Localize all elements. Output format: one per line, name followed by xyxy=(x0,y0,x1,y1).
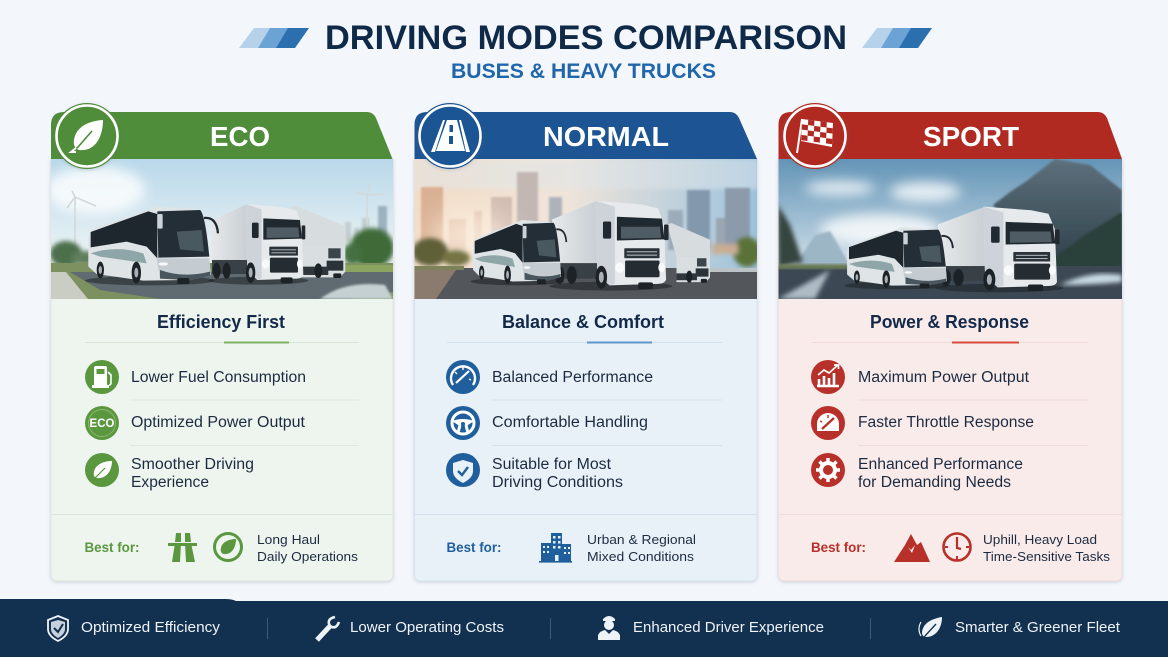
icon: shield check xyxy=(446,453,480,487)
icon: gear xyxy=(811,453,845,487)
icon: fuel pump xyxy=(85,360,119,394)
icon: leaf ring xyxy=(214,534,242,560)
best for: Long Haul xyxy=(257,532,320,547)
decorative right stripes icon xyxy=(862,28,932,48)
section heading: Efficiency First xyxy=(157,312,285,332)
eco photo xyxy=(45,159,394,300)
mode banner xyxy=(414,112,757,159)
feature list: Experience xyxy=(131,474,209,491)
mode title: SPORT xyxy=(923,121,1019,152)
icon: checkered flag badge xyxy=(782,103,848,169)
card body xyxy=(414,159,757,581)
icon: eco: ECO xyxy=(90,418,115,430)
feature list xyxy=(85,360,359,491)
feature list: Suitable for Most xyxy=(492,456,612,473)
feature list: for Demanding Needs xyxy=(858,474,1011,491)
mode banner xyxy=(778,112,1122,159)
subtitle: BUSES & HEAVY TRUCKS xyxy=(451,60,716,83)
sport photo xyxy=(778,159,1123,299)
feature list xyxy=(811,360,1088,491)
panel: normal xyxy=(412,103,761,581)
feature list: Smoother Driving xyxy=(131,456,254,473)
feature list: Optimized Power Output xyxy=(131,414,306,431)
icon: wrench xyxy=(317,617,339,640)
icon: shield xyxy=(48,616,68,641)
icon: throttle gauge xyxy=(811,406,845,440)
icon: leaf badge xyxy=(54,103,120,169)
best for xyxy=(446,532,696,564)
best for xyxy=(811,532,1111,564)
mode banner xyxy=(51,112,392,159)
footer bar: Smarter & Greener Fleet xyxy=(955,620,1120,636)
icon: city buildings xyxy=(539,533,572,563)
icon: road badge xyxy=(417,103,483,169)
feature list: Comfortable Handling xyxy=(492,414,648,431)
panel: eco xyxy=(45,103,394,581)
normal photo xyxy=(412,159,761,299)
icon: mountain xyxy=(894,534,930,562)
footer bar: Lower Operating Costs xyxy=(350,620,504,636)
icon: eco xyxy=(85,406,119,440)
best for: Time-Sensitive Tasks xyxy=(983,549,1111,564)
section heading: Power & Response xyxy=(870,312,1029,332)
feature list: Lower Fuel Consumption xyxy=(131,369,306,386)
mode title: ECO xyxy=(210,121,270,152)
best for: Daily Operations xyxy=(257,549,359,564)
best for: Uphill, Heavy Load xyxy=(983,532,1097,547)
feature list: Maximum Power Output xyxy=(858,369,1030,386)
feature list xyxy=(446,360,722,491)
icon: leaf xyxy=(85,453,119,487)
footer bar xyxy=(0,599,1168,657)
best for: Best for: xyxy=(446,540,502,555)
footer bar: Optimized Efficiency xyxy=(81,620,221,636)
best for: Urban & Regional xyxy=(587,532,696,547)
best for: Mixed Conditions xyxy=(587,549,695,564)
feature list: Balanced Performance xyxy=(492,369,653,386)
decorative left stripes icon xyxy=(239,28,309,48)
icon: steering wheel xyxy=(446,406,480,440)
card body xyxy=(778,159,1122,581)
icon: highway xyxy=(168,533,197,562)
footer bar: Enhanced Driver Experience xyxy=(633,620,824,636)
feature list: Enhanced Performance xyxy=(858,456,1023,473)
icon: leaf xyxy=(919,617,942,640)
icon: driver xyxy=(598,616,620,640)
best for: Best for: xyxy=(811,540,866,555)
heading: DRIVING MODES COMPARISON xyxy=(325,19,847,57)
feature list: Faster Throttle Response xyxy=(858,414,1034,431)
title block xyxy=(239,19,932,83)
feature list: Driving Conditions xyxy=(492,474,623,491)
best for: Best for: xyxy=(84,540,140,555)
panel: sport xyxy=(778,103,1123,581)
card body xyxy=(51,159,393,581)
icon: rising chart xyxy=(811,360,845,394)
mode title: NORMAL xyxy=(543,121,669,152)
section heading: Balance & Comfort xyxy=(502,312,664,332)
icon: clock xyxy=(944,534,970,560)
icon: gauge xyxy=(446,360,480,394)
best for xyxy=(84,532,359,564)
